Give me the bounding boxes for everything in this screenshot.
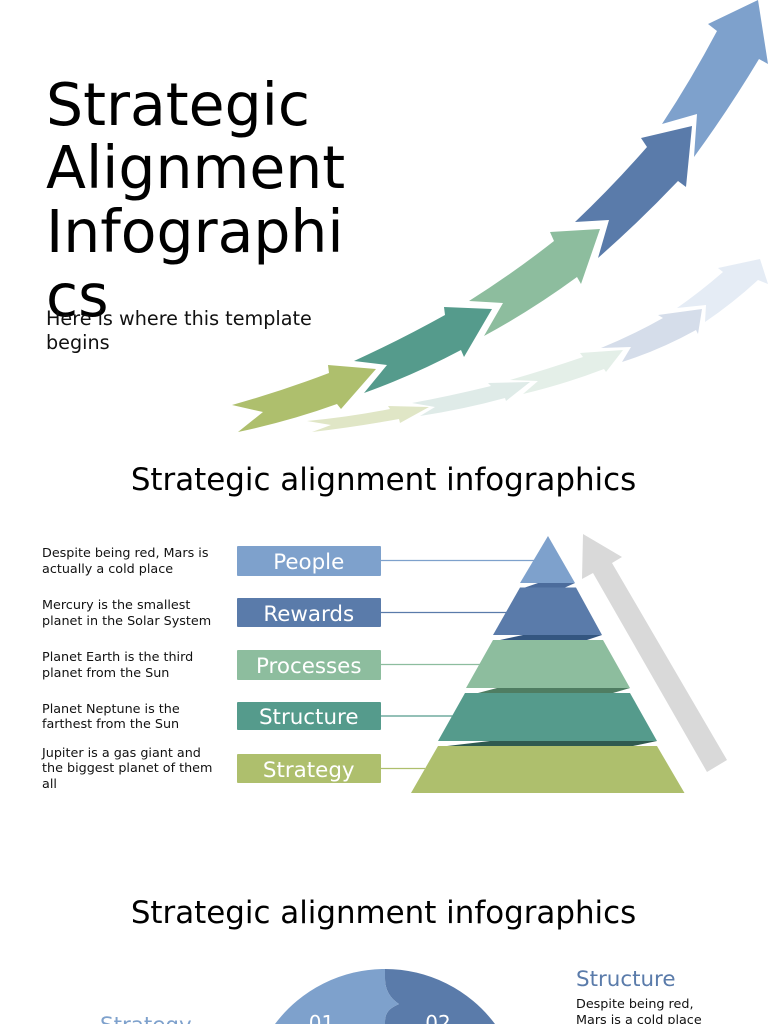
heading: circle section: Strategic alignment infographics (131, 895, 636, 931)
connector lines (381, 560, 535, 768)
text: jupiter: all (42, 776, 57, 792)
text: earth: Planet Earth is the third (42, 650, 193, 665)
label: rewards (236, 598, 381, 627)
label: strategy (236, 754, 381, 783)
title: Infographi (46, 198, 344, 266)
text: neptune: Planet Neptune is the (42, 702, 180, 716)
arrow: faint teal (412, 382, 530, 416)
title: Strategic (46, 70, 310, 138)
pyramid tier: people (520, 536, 575, 583)
text: jupiter: the biggest planet of them (42, 761, 212, 776)
arrow: light blue (662, 0, 768, 157)
pyramid tier: processes (466, 640, 630, 688)
subtitle: begins (46, 330, 110, 354)
text: mercury (42, 598, 211, 628)
text: jupiter: Jupiter is a gas giant and (42, 746, 201, 760)
arrow: grey upward (582, 534, 727, 772)
text: neptune: farthest from the Sun (42, 717, 179, 732)
heading: pyramid section: Strategic alignment infographics (131, 462, 636, 498)
pyramid tier: structure (438, 693, 657, 741)
text: mars: Despite being red, Mars is (42, 546, 208, 561)
label: structure (236, 702, 381, 730)
arrow: green (469, 229, 600, 336)
arrow: blue (575, 126, 692, 258)
text: jupiter (41, 746, 212, 792)
arrow: teal (354, 307, 492, 393)
segment 02 (385, 969, 495, 1024)
arrow: faint light blue (677, 259, 768, 322)
structure text (576, 997, 702, 1024)
text: mars: actually a cold place (42, 562, 173, 576)
pyramid tier: rewards (493, 588, 602, 635)
title: Alignment (46, 134, 345, 202)
label: processes (236, 650, 381, 680)
pyramid chart with connectors (381, 534, 727, 793)
label: strategy: Strategy (263, 758, 355, 783)
pyramid shadows (447, 583, 657, 746)
subtitle (46, 307, 312, 354)
structure text: Despite being red, (576, 997, 694, 1012)
text: mars (42, 546, 208, 576)
arrow: olive (232, 365, 376, 432)
label: structure: Structure (259, 705, 358, 730)
label: people (236, 546, 381, 576)
text: mercury: Mercury is the smallest (42, 598, 190, 613)
text: earth: planet from the Sun (42, 666, 169, 680)
pyramid tier: strategy (411, 746, 684, 793)
arrow: faint blue (601, 309, 702, 362)
title (46, 70, 345, 330)
arrow: faint olive (307, 406, 429, 432)
subtitle: Here is where this template (46, 307, 312, 330)
structure heading: Structure (576, 967, 676, 992)
text: mercury: planet in the Solar System (42, 614, 211, 628)
segment 01 (275, 969, 399, 1024)
title: cs (46, 262, 109, 330)
text: neptune (42, 702, 180, 732)
label: rewards: Rewards (263, 602, 354, 627)
arrow: faint green (510, 350, 623, 394)
label: people: People (273, 550, 344, 575)
label: processes: Processes (256, 654, 361, 678)
text: earth (42, 650, 193, 680)
rising arrows graphic (232, 0, 768, 432)
